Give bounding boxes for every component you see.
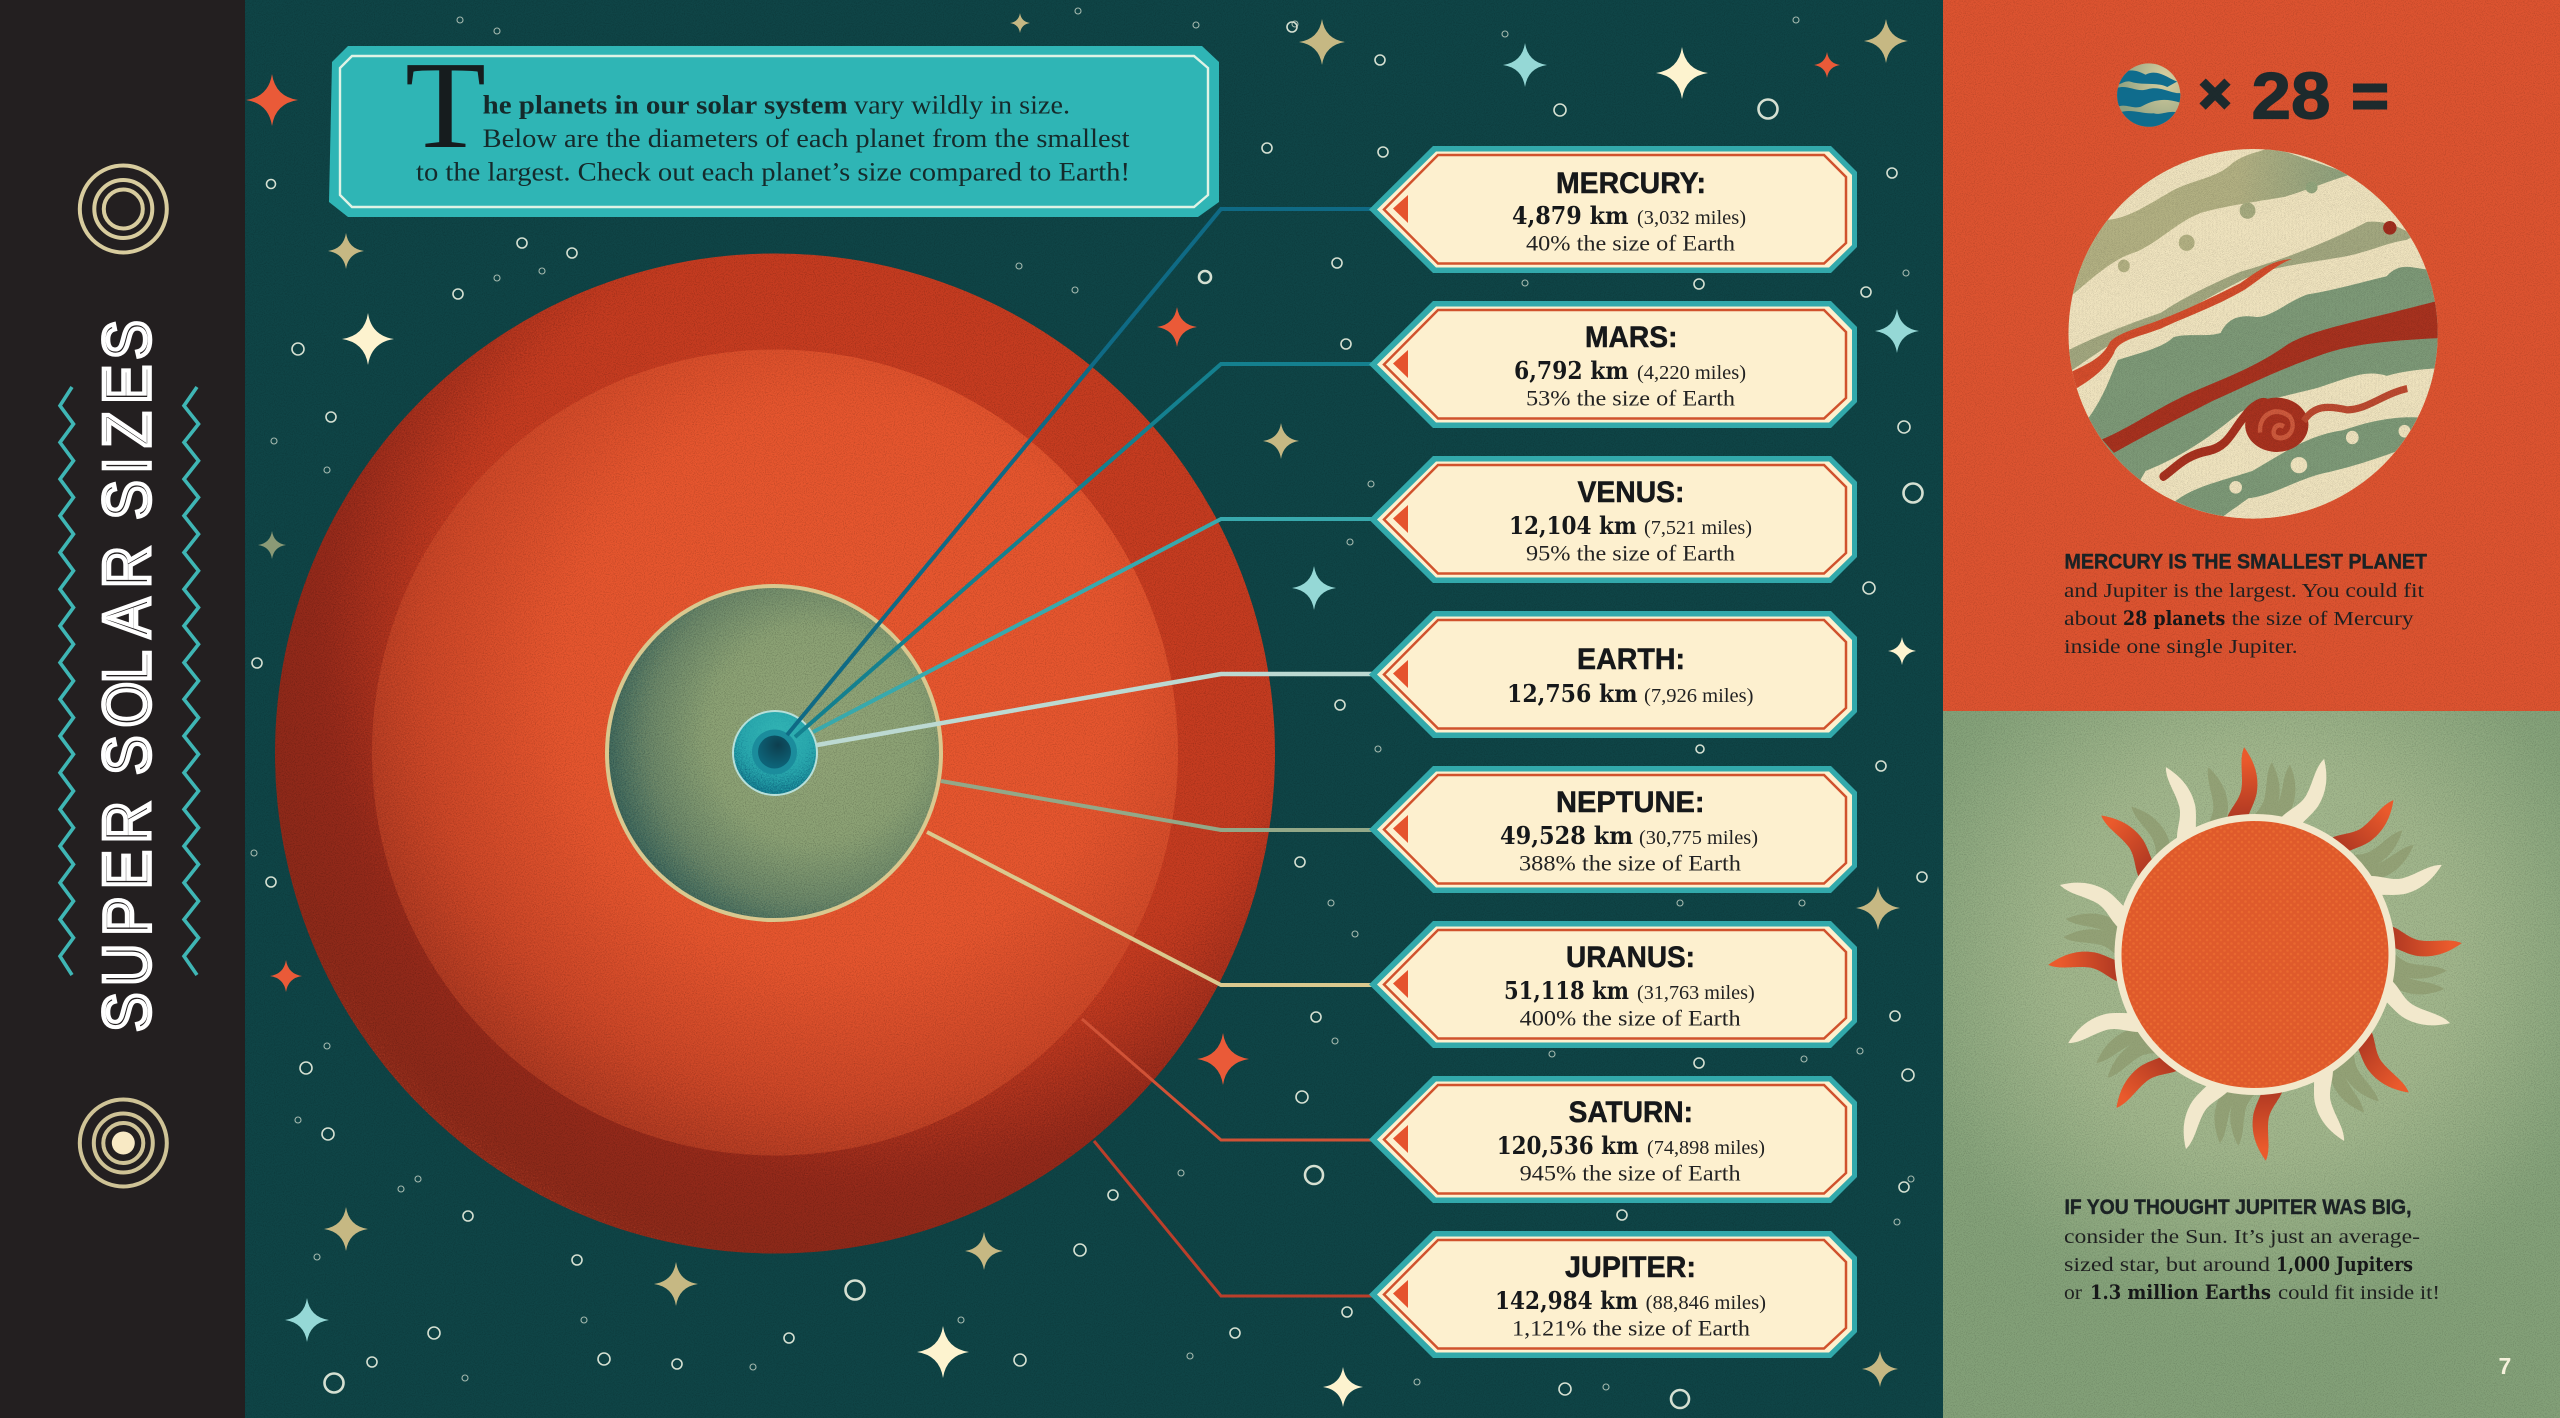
label panel: Earth: EARTH: (1577, 643, 1685, 676)
sun disc (2118, 818, 2392, 1092)
label panel: Mercury: MERCURY: (1556, 167, 1706, 200)
label panel: Venus (1369, 456, 1857, 583)
text: Sun fact: IF YOU THOUGHT JUPITER WAS BIG, (2064, 1196, 2412, 1219)
label panel: Earth: (7,926 miles) (1644, 685, 1754, 707)
label panel: Jupiter (1369, 1231, 1857, 1358)
icon: small Mercury (2114, 63, 2182, 129)
label panel: Saturn: 945% the size of Earth (1520, 1160, 1741, 1186)
intro panel (329, 37, 1219, 217)
label panel: Neptune: 388% the size of Earth (1519, 850, 1741, 876)
label panel: Uranus: 400% the size of Earth (1520, 1006, 1741, 1030)
label panel: Neptune: NEPTUNE: (1556, 786, 1704, 819)
label panel: Mercury (1369, 146, 1857, 273)
intro text: vary wildly in size. (854, 90, 1070, 120)
title: Super Solar Sizes: SUPER SOLAR SIZES (91, 321, 164, 1032)
label panel: Uranus: 51,118 km (1504, 976, 1629, 1005)
label panel: Saturn: SATURN: (1569, 1096, 1693, 1129)
text: Sun fact: sized star, but around (2064, 1254, 2270, 1276)
text: Mercury fact: MERCURY IS THE SMALLEST PLANET (2064, 550, 2427, 573)
decorative small rings (251, 8, 1927, 1408)
label panel: Uranus: URANUS: (1566, 941, 1695, 974)
text: Sun fact: 1.3 million Earths (2090, 1280, 2271, 1304)
label panel: Neptune (1369, 766, 1857, 893)
equation: times 28 equals (2199, 59, 2389, 133)
text: Mercury fact: inside one single Jupiter. (2064, 636, 2298, 658)
text: Mercury fact: and Jupiter is the largest. You could fit (2064, 580, 2425, 602)
planet: Jupiter scale disc (275, 254, 1275, 1254)
label panel: Venus: 12,104 km (1509, 511, 1637, 540)
icon: bottom concentric rings (80, 1100, 167, 1186)
sun ray shadows (2061, 760, 2449, 1148)
intro text: Below are the diameters of each planet from the smallest (483, 124, 1130, 153)
leader line: Jupiter (1094, 1141, 1372, 1296)
label panel: Uranus (1369, 921, 1857, 1048)
text: Sun fact (2064, 1196, 2440, 1304)
planet: Uranus and Neptune scale disc (605, 584, 943, 922)
text: Sun fact: 1,000 Jupiters (2276, 1252, 2413, 1276)
text: Mercury fact: the size of Mercury (2232, 608, 2414, 630)
text: Sun fact: could fit inside it! (2278, 1282, 2440, 1304)
label panel: Neptune: 49,528 km (1500, 821, 1633, 850)
panel: orange Jupiter panel background (1943, 0, 2560, 711)
text: Sun fact: consider the Sun. It’s just an average- (2064, 1226, 2420, 1248)
label panel: Earth: 12,756 km (1507, 679, 1638, 708)
label panel: Saturn (1369, 1076, 1857, 1203)
intro text: to the largest. Check out each planet’s size compared to Earth! (416, 158, 1130, 186)
page number: 7 (2498, 1353, 2511, 1379)
label panel: Mars: (4,220 miles) (1637, 362, 1746, 384)
planet: Saturn scale disc (372, 350, 1178, 1156)
leader line: Uranus (927, 832, 1372, 985)
intro text (416, 90, 1130, 186)
label panel: Mercury: (3,032 miles) (1637, 207, 1746, 229)
drop cap T: T (405, 37, 486, 175)
panel: green Sun panel background (1943, 711, 2560, 1418)
label panel: Venus: (7,521 miles) (1644, 517, 1752, 539)
equation: times 28 equals: × (2199, 64, 2231, 124)
label panel: Saturn: (74,898 miles) (1647, 1137, 1765, 1159)
background: space field (245, 0, 1943, 1418)
leader line: Earth (817, 674, 1372, 745)
label panel: Mercury: 40% the size of Earth (1526, 230, 1735, 256)
label panel: Uranus: (31,763 miles) (1637, 982, 1755, 1004)
intro text: he planets in our solar system (483, 90, 848, 120)
label panel: Mars (1369, 301, 1857, 428)
text: Mercury fact: about (2064, 608, 2118, 630)
label panel: Mars: 6,792 km (1514, 356, 1629, 385)
icon: top concentric rings (80, 166, 167, 252)
label panel: Mars: MARS: (1585, 321, 1678, 354)
label panel: Venus: 95% the size of Earth (1526, 540, 1735, 566)
right zigzag (184, 387, 198, 975)
panel: black spine (0, 0, 245, 1418)
leader line: Neptune (941, 781, 1372, 830)
label panel: Jupiter: JUPITER: (1565, 1251, 1696, 1284)
equation: times 28 equals: = (2351, 60, 2389, 132)
label panel: Jupiter: 1,121% the size of Earth (1512, 1316, 1750, 1340)
label panel: Jupiter: 142,984 km (1495, 1286, 1638, 1315)
leader line: Mars (795, 364, 1372, 737)
label panel: Jupiter: (88,846 miles) (1646, 1292, 1766, 1314)
leader line: Saturn (1082, 1019, 1372, 1140)
label panel: Mercury: 4,879 km (1512, 201, 1629, 230)
text: Sun fact: or (2064, 1282, 2082, 1304)
label panel: Saturn: 120,536 km (1497, 1131, 1639, 1160)
equation: times 28 equals: 28 (2252, 59, 2330, 133)
leader line: Mercury (787, 209, 1372, 735)
planet: Earth and Venus scale disc (732, 710, 818, 796)
sun rays (2048, 747, 2462, 1161)
leader line: Venus (813, 519, 1372, 732)
label panel: Neptune: (30,775 miles) (1639, 827, 1758, 849)
illustration: Sun (2048, 747, 2462, 1161)
illustration: Jupiter (2068, 149, 2438, 519)
left zigzag (60, 387, 74, 975)
label panel: Mars: 53% the size of Earth (1526, 386, 1735, 410)
label panel: Earth (1369, 611, 1857, 738)
text: Mercury fact: 28 planets (2123, 606, 2225, 630)
decorative stars (246, 13, 1919, 1407)
text: Mercury fact (2064, 550, 2427, 658)
label panel: Venus: VENUS: (1578, 476, 1684, 509)
